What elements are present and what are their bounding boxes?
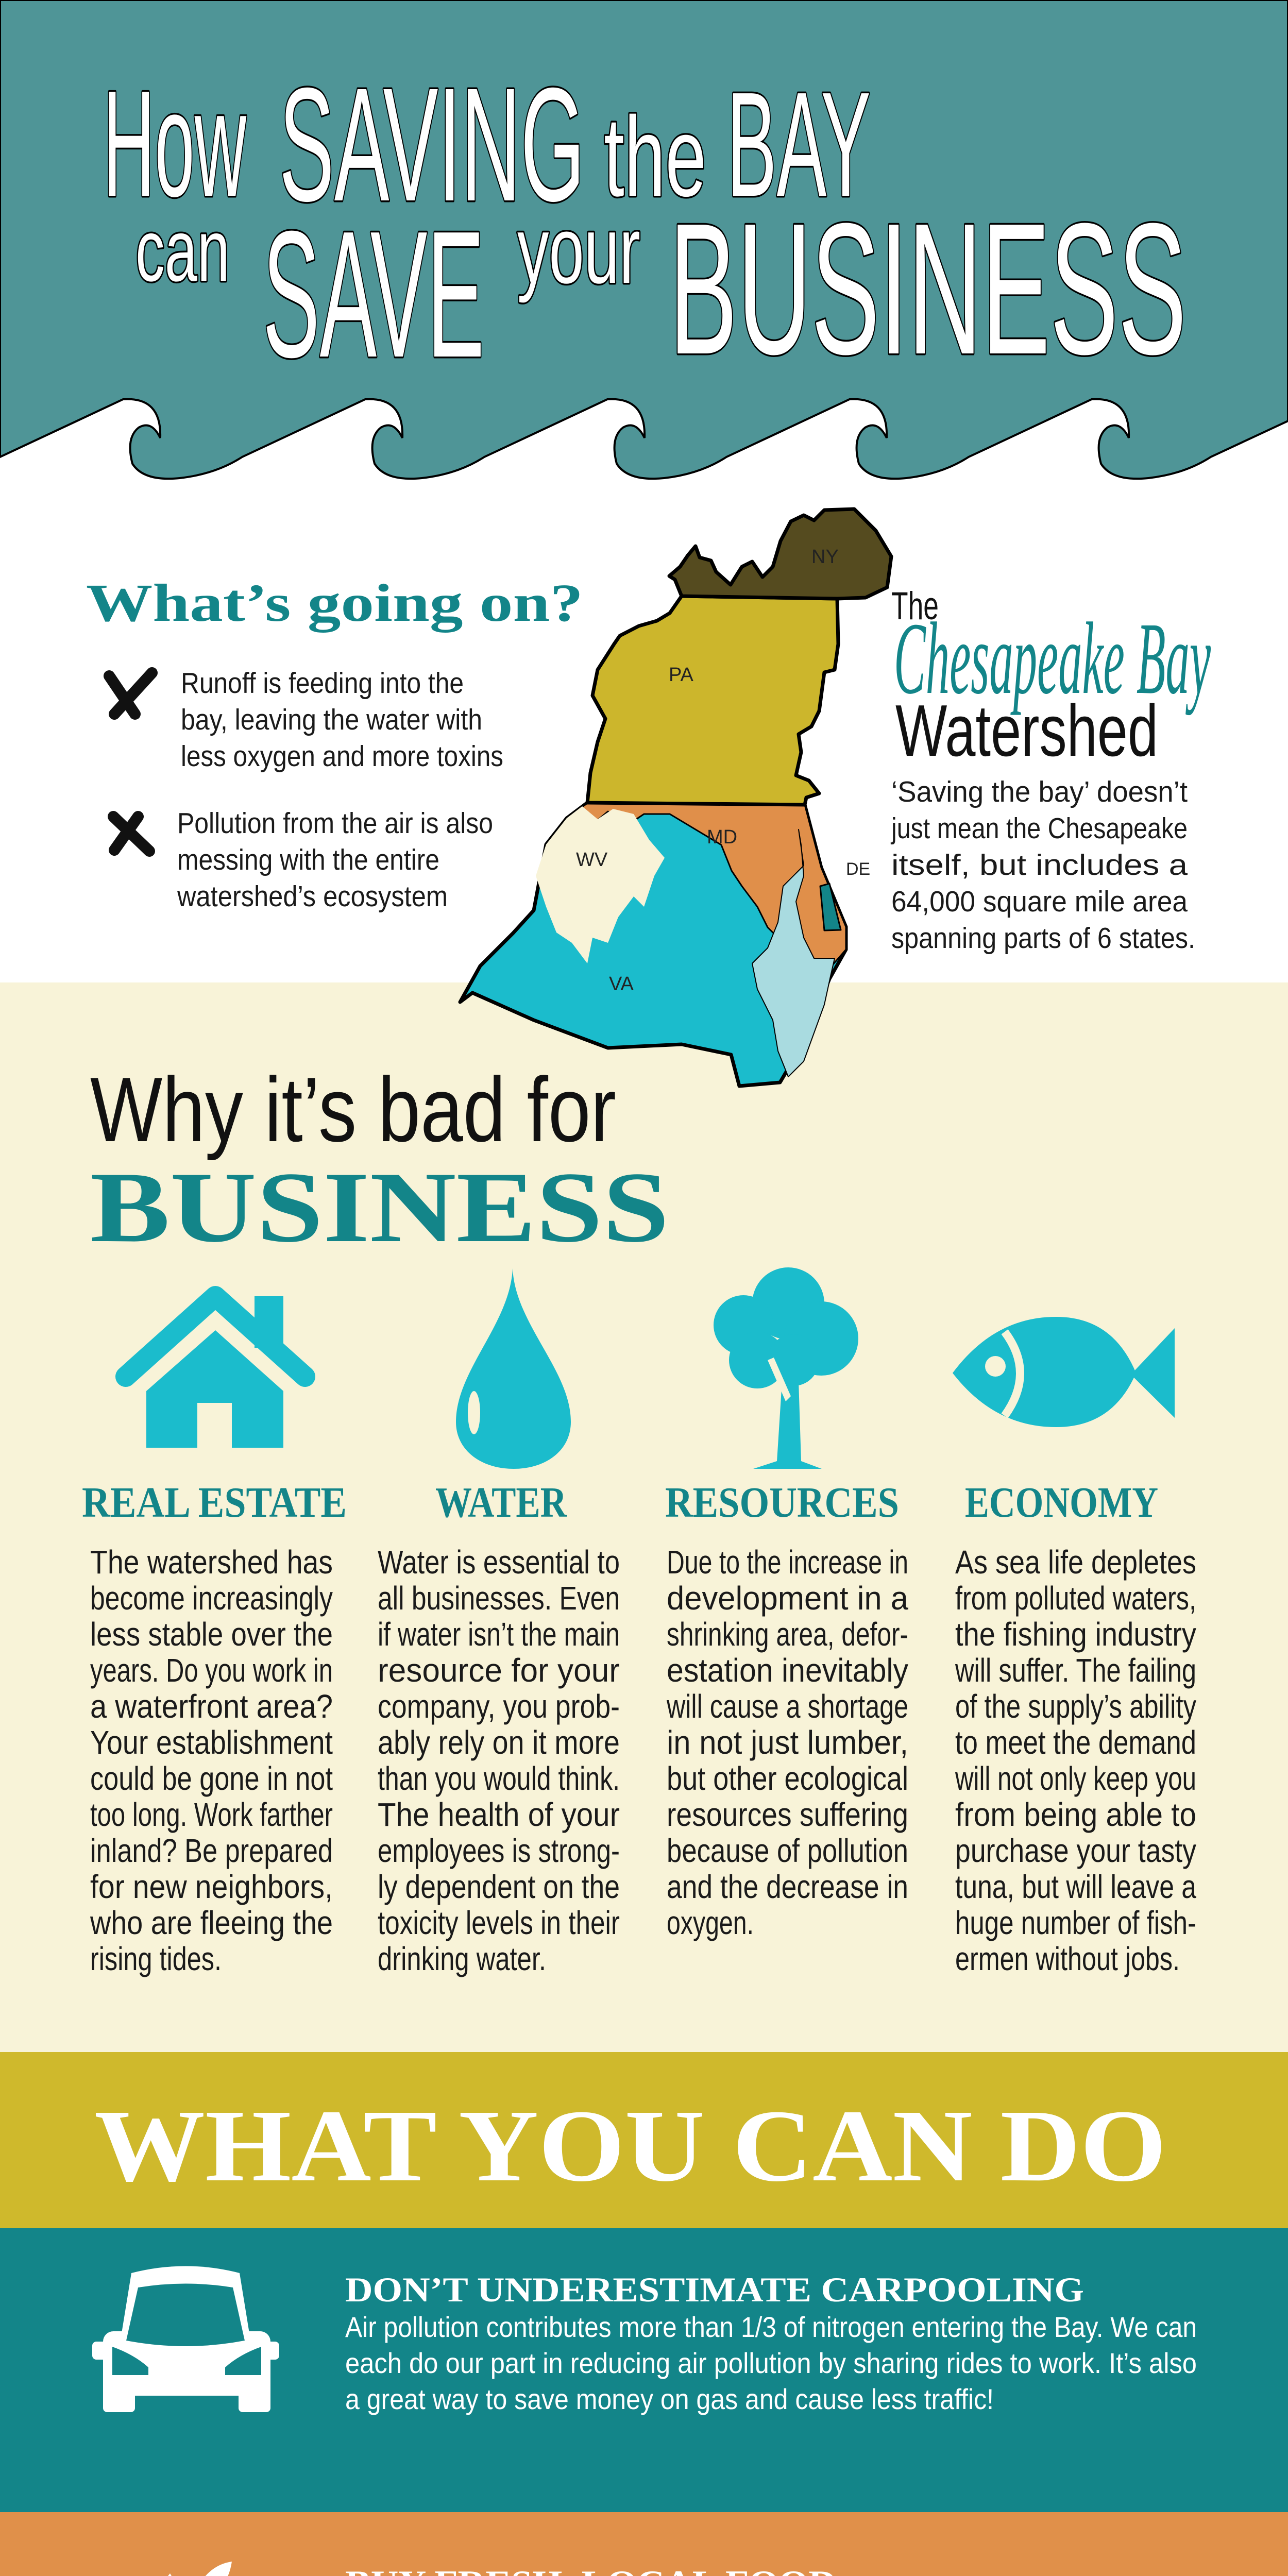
text: resources: in not just lumber, — [667, 1724, 908, 1761]
heading: why it's bad for business — [90, 1058, 669, 1263]
watershed paragraph: spanning parts of 6 states. — [891, 922, 1195, 955]
text: real estate: Your establishment — [90, 1724, 333, 1761]
text: economy: to meet the demand — [955, 1724, 1196, 1761]
text: resources: shrinking area, defor- — [667, 1616, 908, 1653]
map: chesapeake watershed: MD — [707, 826, 737, 848]
watershed paragraph: itself, but includes a — [891, 849, 1188, 882]
column headings: WATER — [435, 1479, 567, 1527]
text: resources: resources suffering — [667, 1796, 908, 1833]
text: water: company, you prob- — [378, 1688, 620, 1725]
watershed paragraph: just mean the Chesapeake — [890, 812, 1188, 845]
icon: car — [92, 2266, 279, 2412]
text: resources — [666, 1544, 908, 1941]
text: real estate: could be gone in not — [90, 1760, 333, 1797]
text: real estate: a waterfront area? — [90, 1688, 333, 1725]
watershed paragraph — [890, 775, 1195, 955]
panel: carpooling: each do our part in reducing air pollution by sharing rides to work. It’s also — [345, 2347, 1197, 2379]
text: real estate — [90, 1544, 333, 1977]
header background — [0, 0, 1288, 984]
text: real estate: years. Do you work in — [90, 1652, 333, 1689]
text: water: Water is essential to — [378, 1544, 620, 1581]
text: real estate: inland? Be prepared — [90, 1832, 333, 1869]
bullet 1: less oxygen and more toxins — [181, 740, 503, 773]
text: economy: huge number of fish- — [955, 1904, 1196, 1941]
text: real estate: for new neighbors, — [90, 1868, 333, 1905]
text: water: ly dependent on the — [378, 1868, 620, 1905]
text: resources: oxygen. — [667, 1904, 754, 1941]
heading: what's going on: What’s going on? — [86, 573, 583, 633]
panel: carpooling: a great way to save money on gas and cause less traffic! — [345, 2383, 994, 2415]
panel: carpooling — [0, 2228, 1288, 2512]
text: real estate: too long. Work farther — [90, 1796, 333, 1833]
icon: fish — [953, 1317, 1175, 1427]
text: resources: but other ecological — [667, 1760, 908, 1797]
text: economy: tuna, but will leave a — [955, 1868, 1196, 1905]
watershed heading: The — [891, 584, 939, 628]
watershed heading — [891, 584, 1211, 772]
watershed heading: Watershed — [895, 690, 1158, 772]
title: SAVING — [279, 54, 585, 235]
text: economy: of the supply’s ability — [955, 1688, 1196, 1725]
bullet 2: Pollution from the air is also — [177, 807, 493, 840]
title: can — [135, 201, 230, 300]
text: economy: As sea life depletes — [955, 1544, 1196, 1581]
title: How — [103, 60, 247, 228]
text: water: toxicity levels in their — [378, 1904, 620, 1941]
text: water: if water isn’t the main — [378, 1616, 620, 1653]
text: resources: development in a — [667, 1580, 908, 1617]
bullet 1 — [109, 667, 503, 773]
icon: tree — [714, 1267, 858, 1469]
map: chesapeake watershed — [460, 509, 891, 1086]
title: BAY — [727, 61, 871, 228]
text: water: than you would think. — [378, 1760, 620, 1797]
text: water: ably rely on it more — [378, 1724, 620, 1761]
text: resources: will cause a shortage — [666, 1688, 908, 1725]
text: real estate: who are fleeing the — [90, 1904, 333, 1941]
panel: local food — [0, 2512, 1288, 2576]
icon: apple — [100, 2562, 275, 2576]
text: economy: ermen without jobs. — [955, 1940, 1180, 1977]
map: chesapeake watershed: DE — [846, 859, 870, 879]
bullet 1: Runoff is feeding into the — [181, 667, 464, 700]
text: resources: Due to the increase in — [667, 1544, 908, 1581]
column headings — [82, 1479, 1158, 1527]
text: economy: from being able to — [955, 1796, 1196, 1833]
bullet 1: bay, leaving the water with — [181, 703, 482, 736]
title: your — [517, 197, 640, 303]
panel: carpooling: Air pollution contributes more than 1/3 of nitrogen entering the Bay. We can — [345, 2311, 1197, 2343]
title — [103, 54, 1187, 395]
heading: why it's bad for business: BUSINESS — [90, 1151, 669, 1263]
map: chesapeake watershed: NY — [811, 546, 839, 568]
text: real estate: rising tides. — [90, 1940, 222, 1977]
text: economy: from polluted waters, — [955, 1580, 1196, 1617]
title: SAVE — [263, 194, 484, 395]
icon: house — [126, 1296, 305, 1448]
text: water: employees is strong- — [378, 1832, 620, 1869]
cream background: why section — [0, 982, 1288, 2052]
banner: what you can do — [0, 2052, 1288, 2228]
text: water: drinking water. — [378, 1940, 546, 1977]
bullet 2 — [113, 807, 493, 913]
text: economy: the fishing industry — [955, 1616, 1196, 1653]
bullet 2: watershed’s ecosystem — [177, 880, 448, 913]
text: water: resource for your — [378, 1652, 620, 1689]
watershed paragraph: 64,000 square mile area — [891, 885, 1188, 918]
map: chesapeake watershed: WV — [576, 849, 608, 871]
text: resources: estation inevitably — [667, 1652, 908, 1689]
icon: water drop — [456, 1268, 571, 1469]
watershed paragraph: ‘Saving the bay’ doesn’t — [891, 775, 1188, 808]
column headings: RESOURCES — [665, 1479, 899, 1527]
text: economy: will suffer. The failing — [955, 1652, 1196, 1689]
map: chesapeake watershed: PA — [669, 664, 694, 686]
bullet 2: messing with the entire — [177, 843, 439, 876]
map: chesapeake watershed: VA — [609, 973, 634, 995]
heading: why it's bad for business: Why it’s bad for — [90, 1058, 616, 1161]
text: real estate: The watershed has — [90, 1544, 333, 1581]
text: real estate: less stable over the — [90, 1616, 333, 1653]
title: the — [604, 93, 706, 220]
text: water — [378, 1544, 620, 1977]
panel: carpooling: DON’T UNDERESTIMATE CARPOOLING — [345, 2270, 1084, 2309]
text: resources: and the decrease in — [667, 1868, 908, 1905]
text: resources: because of pollution — [667, 1832, 908, 1869]
text: economy: will not only keep you — [955, 1760, 1196, 1797]
text: economy — [955, 1544, 1196, 1977]
column headings: ECONOMY — [965, 1479, 1158, 1527]
text: real estate: become increasingly — [90, 1580, 333, 1617]
text: water: all businesses. Even — [378, 1580, 620, 1617]
column headings: REAL ESTATE — [82, 1479, 347, 1527]
banner: what you can do: WHAT YOU CAN DO — [94, 2089, 1166, 2203]
text: economy: purchase your tasty — [955, 1832, 1196, 1869]
text: water: The health of your — [378, 1796, 620, 1833]
